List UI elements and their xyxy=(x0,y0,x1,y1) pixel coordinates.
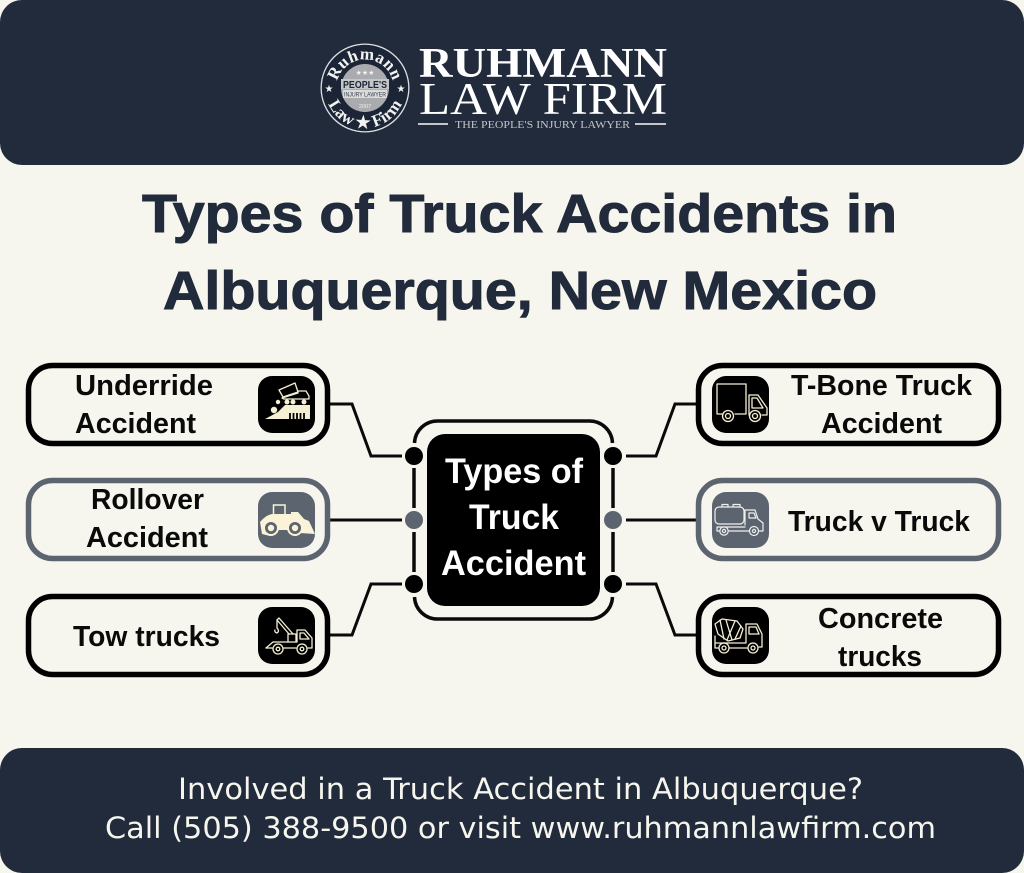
icon: law firm seal: PEOPLE'S xyxy=(343,80,387,91)
logo wordmark: Ruhmann: RUHMANN xyxy=(419,41,667,87)
panel: footer call to action xyxy=(0,748,1024,873)
panel: concrete trucks xyxy=(698,596,998,674)
panel: concrete trucks: trucks xyxy=(838,641,922,673)
icon: dump truck xyxy=(258,376,315,433)
panel: truck v truck xyxy=(698,480,998,558)
logo tagline: THE PEOPLE'S INJURY LAWYER xyxy=(455,120,630,131)
title: Types of Truck Accidents in xyxy=(142,184,897,244)
icon: law firm seal: 2007 xyxy=(359,104,371,110)
panel: truck v truck: Truck v Truck xyxy=(788,506,971,538)
panel: tow trucks xyxy=(28,596,328,674)
icon: law firm seal xyxy=(320,44,410,132)
icon: law firm seal: Ruhmann xyxy=(326,50,400,80)
icon: law firm seal: Law ★ Firm xyxy=(328,98,402,130)
title xyxy=(142,184,897,321)
panel: underride accident xyxy=(28,366,328,444)
connector lines xyxy=(330,404,697,635)
title: Albuquerque, New Mexico xyxy=(163,261,877,321)
panel: t-bone truck accident xyxy=(698,366,998,444)
icon: wheel loader xyxy=(258,492,315,548)
panel: rollover accident: Rollover xyxy=(91,484,204,516)
panel: rollover accident: Accident xyxy=(86,522,208,554)
icon: tow truck xyxy=(258,607,315,664)
logo: Ruhmann Law Firm xyxy=(320,41,667,132)
icon: box truck xyxy=(712,376,769,433)
icon: tanker truck xyxy=(712,492,769,548)
icon: law firm seal: ★ xyxy=(325,84,334,95)
logo wordmark: Law Firm: LAW FIRM xyxy=(419,74,667,124)
central hub: types of truck accident xyxy=(405,421,622,619)
panel: footer call to action: Call (505) 388-9500 or visit www.ruhmannlawfirm.com xyxy=(105,811,936,845)
panel: underride accident: Underride xyxy=(75,370,213,402)
panel: footer call to action: Involved in a Truck Accident in Albuquerque? xyxy=(178,772,863,806)
panel: underride accident: Accident xyxy=(75,408,196,440)
icon: cement mixer truck xyxy=(712,607,769,664)
icon: law firm seal: ★ xyxy=(397,84,406,95)
panel: concrete trucks: Concrete xyxy=(818,603,943,635)
panel: t-bone truck accident: T-Bone Truck xyxy=(791,370,973,402)
panel: tow trucks: Tow trucks xyxy=(73,621,220,653)
central hub: types of truck accident: Truck xyxy=(469,498,560,537)
panel: rollover accident xyxy=(28,480,328,558)
central hub: types of truck accident: Types of xyxy=(445,452,583,491)
panel: header band xyxy=(0,0,1024,165)
icon: law firm seal: ★★★ xyxy=(356,69,374,77)
icon: law firm seal: INJURY LAWYER xyxy=(344,92,386,98)
central hub: types of truck accident: Accident xyxy=(441,544,586,583)
panel: t-bone truck accident: Accident xyxy=(821,408,942,440)
